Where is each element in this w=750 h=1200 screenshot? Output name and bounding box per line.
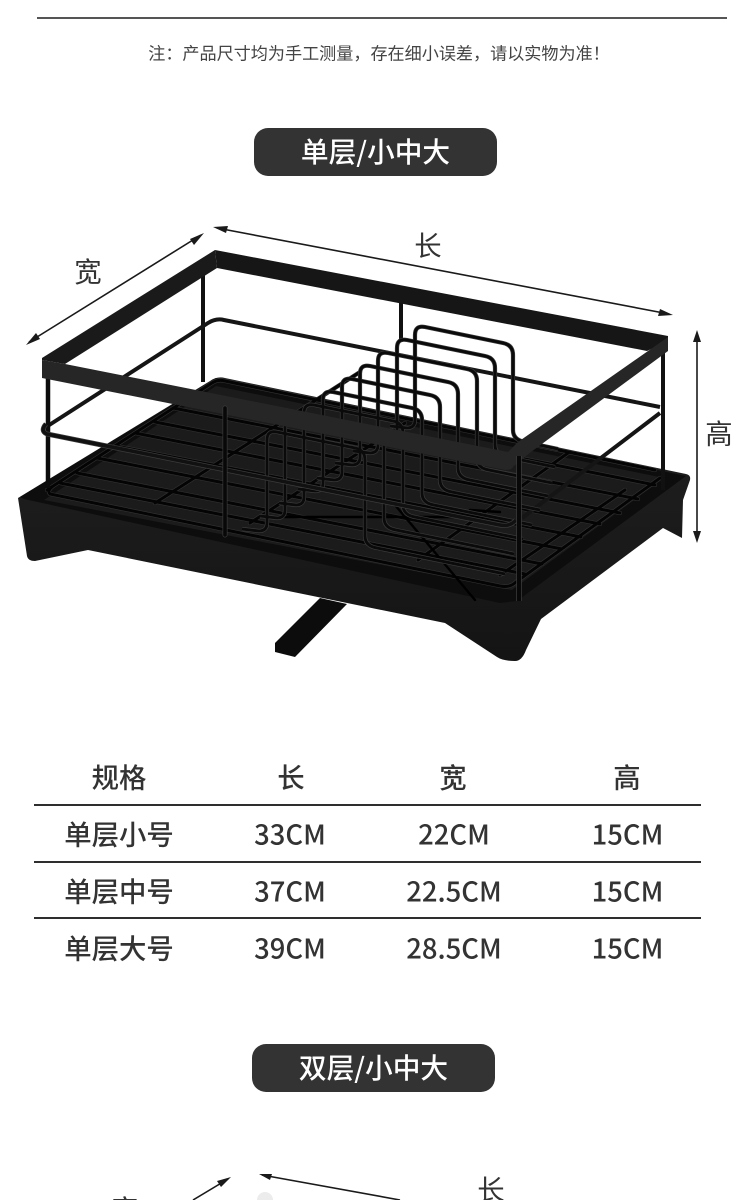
heading: single layer sizes: 单层/小中大 <box>301 130 450 170</box>
dimension label: width: 宽 <box>74 249 102 289</box>
board core wires <box>242 327 558 574</box>
product diagram: single layer dish rack with dimensions <box>18 226 701 661</box>
front right post <box>516 456 522 601</box>
table row: medium: 单层中号 <box>64 869 174 909</box>
rack corner fragment <box>257 1192 273 1200</box>
table row: medium: 22.5CM <box>406 869 502 909</box>
table row: medium: 15CM <box>592 869 663 909</box>
table row: large: 15CM <box>592 926 663 966</box>
heading: double layer sizes <box>252 1044 495 1092</box>
table header row: 宽 <box>439 755 467 795</box>
dish divider boards <box>242 327 558 574</box>
table row: large: 39CM <box>254 926 326 966</box>
dimension arrow: height <box>693 330 701 543</box>
drying grid wires <box>47 372 660 600</box>
front wire <box>43 424 516 525</box>
heading: single layer sizes <box>254 128 497 176</box>
table row: large: 28.5CM <box>406 926 502 966</box>
top frame: back and side bands <box>42 250 668 466</box>
length arrow, cropped <box>259 1174 400 1200</box>
size table: single layer <box>34 755 701 966</box>
dimension arrow: width <box>26 233 204 345</box>
dimension label: height: 高 <box>705 411 733 451</box>
table row: small: 33CM <box>254 812 326 852</box>
tray body <box>18 377 690 661</box>
board outlines highlight <box>242 327 558 574</box>
dimension label: length: 长 <box>414 223 442 263</box>
table header row <box>92 755 641 795</box>
table header row: 规格 <box>92 755 146 795</box>
top frame: front band <box>42 360 514 470</box>
back foot <box>275 598 347 657</box>
back frame posts <box>203 270 663 490</box>
table row: medium: 37CM <box>254 869 326 909</box>
tray inner surface <box>20 378 686 603</box>
heading: double layer sizes: 双层/小中大 <box>299 1046 448 1086</box>
width arrow, cropped <box>193 1177 231 1200</box>
table row: small: 15CM <box>592 812 663 852</box>
table row: large <box>64 926 663 966</box>
measurement note: 注：产品尺寸均为手工测量，存在细小误差，请以实物为准！ <box>148 39 610 64</box>
table header row: 高 <box>613 755 641 795</box>
front left post <box>46 378 50 488</box>
table row: medium <box>64 869 663 909</box>
table header row: 长 <box>277 755 305 795</box>
table row: small: 单层小号 <box>64 812 174 852</box>
table row: small: 22CM <box>418 812 490 852</box>
middle wire, back and side <box>43 319 660 518</box>
front center post <box>222 408 228 535</box>
table row: small <box>64 812 663 852</box>
top divider line <box>37 17 727 19</box>
dimension arrow: length <box>213 226 673 316</box>
table row: large: 单层大号 <box>64 926 174 966</box>
